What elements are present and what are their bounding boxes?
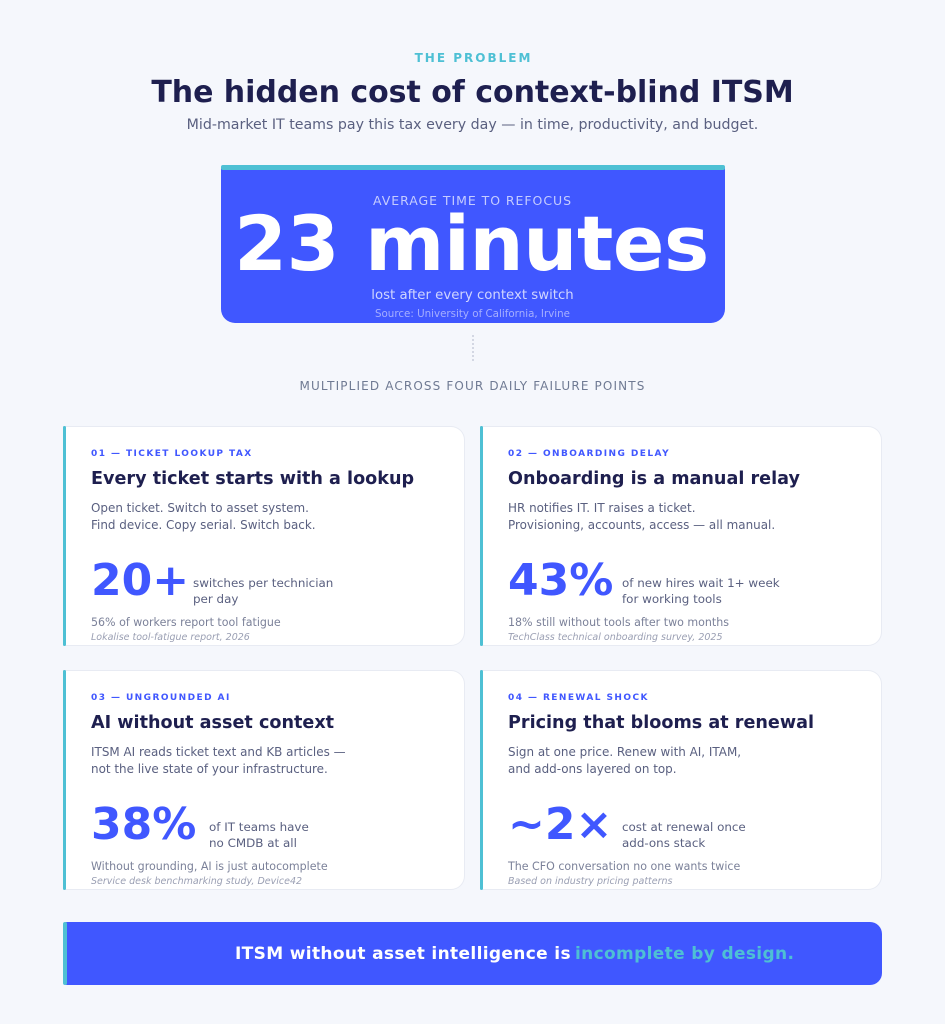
hero panel <box>220 165 724 323</box>
stat label: cost at renewal once <box>622 820 746 834</box>
card heading: Every ticket starts with a lookup <box>91 469 414 489</box>
subtitle: Mid-market IT teams pay this tax every day — in time, productivity, and budget. <box>187 117 758 133</box>
stat label: no CMDB at all <box>209 836 297 850</box>
card body <box>508 500 775 532</box>
card body: and add-ons layered on top. <box>508 762 677 776</box>
stat label: add-ons stack <box>622 836 705 850</box>
footnote: Without grounding, AI is just autocomplete <box>91 860 328 873</box>
panel: card 02 <box>480 426 882 646</box>
stat label: switches per technician <box>193 576 333 590</box>
card tag: 01 — TICKET LOOKUP TAX <box>91 449 253 459</box>
hero caption: lost after every context switch <box>371 288 574 302</box>
panel: card 01 <box>63 426 465 646</box>
conclusion banner <box>63 922 882 984</box>
stat number: 43% <box>508 554 613 606</box>
stat label <box>622 576 780 606</box>
accent <box>63 670 66 890</box>
card body <box>508 744 741 776</box>
stat label: for working tools <box>622 592 722 606</box>
card body: not the live state of your infrastructure. <box>91 762 328 776</box>
panel: card 03 <box>63 670 465 890</box>
hero number: 23 minutes <box>234 199 709 288</box>
card body: Find device. Copy serial. Switch back. <box>91 518 316 532</box>
banner accent <box>63 922 67 984</box>
card body: Sign at one price. Renew with AI, ITAM, <box>508 744 741 758</box>
card body <box>91 500 316 532</box>
card heading: Pricing that blooms at renewal <box>508 713 814 733</box>
card tag: 03 — UNGROUNDED AI <box>91 693 231 703</box>
stat number: ~2× <box>508 798 612 850</box>
accent <box>63 426 66 646</box>
hero top accent <box>220 165 724 170</box>
card tag: 04 — RENEWAL SHOCK <box>508 693 649 703</box>
stat label: of IT teams have <box>209 820 309 834</box>
connector <box>472 335 474 363</box>
banner text: ITSM without asset intelligence isincomplete by design. <box>235 944 794 964</box>
footnote: 18% still without tools after two months <box>508 616 729 629</box>
stat label: per day <box>193 592 238 606</box>
stat number: 20+ <box>91 554 189 606</box>
source: Service desk benchmarking study, Device42 <box>91 876 302 886</box>
eyebrow: THE PROBLEM <box>415 51 532 65</box>
card body <box>91 744 346 776</box>
card heading: AI without asset context <box>91 713 334 733</box>
card body: ITSM AI reads ticket text and KB articles — <box>91 744 346 758</box>
hero label: AVERAGE TIME TO REFOCUS <box>373 192 572 208</box>
stat label: of new hires wait 1+ week <box>622 576 780 590</box>
accent <box>480 426 483 646</box>
card body: HR notifies IT. IT raises a ticket. <box>508 500 696 514</box>
card body: Open ticket. Switch to asset system. <box>91 500 309 514</box>
card tag: 02 — ONBOARDING DELAY <box>508 449 670 459</box>
accent <box>480 670 483 890</box>
card body: Provisioning, accounts, access — all manual. <box>508 518 775 532</box>
panel: card 04 <box>480 670 882 890</box>
stat number: 38% <box>91 798 196 850</box>
section label: MULTIPLIED ACROSS FOUR DAILY FAILURE POINTS <box>300 379 645 393</box>
card heading: Onboarding is a manual relay <box>508 469 800 489</box>
stat label <box>622 820 746 850</box>
source: Based on industry pricing patterns <box>508 876 673 886</box>
hero source: Source: University of California, Irvine <box>375 308 570 320</box>
source: TechClass technical onboarding survey, 2025 <box>508 632 722 642</box>
stat label <box>193 576 333 606</box>
stat label <box>209 820 309 850</box>
title: The hidden cost of context-blind ITSM <box>151 75 794 110</box>
source: Lokalise tool-fatigue report, 2026 <box>91 632 250 642</box>
footnote: The CFO conversation no one wants twice <box>508 860 740 873</box>
footnote: 56% of workers report tool fatigue <box>91 616 281 629</box>
